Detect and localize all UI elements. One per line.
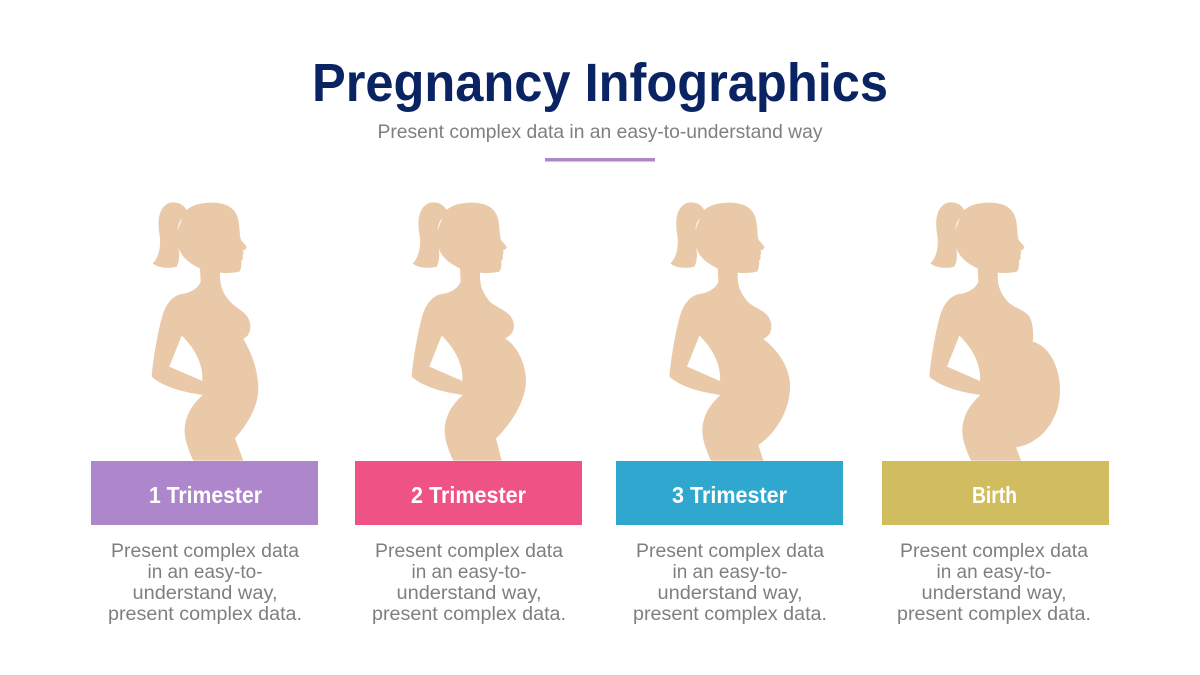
label text: 3 Trimester [672, 482, 787, 508]
description [372, 541, 566, 625]
label text: 1 Trimester [149, 482, 262, 508]
description: in an easy-to- [672, 562, 788, 583]
icon: pregnant silhouette, first trimester [152, 202, 258, 461]
description: present complex data. [633, 604, 827, 625]
description [108, 541, 302, 625]
description: present complex data. [372, 604, 566, 625]
description: Present complex data [375, 541, 563, 562]
description: understand way, [396, 583, 542, 604]
description: Present complex data [636, 541, 824, 562]
icon: pregnant silhouette, third trimester [669, 202, 790, 461]
description: in an easy-to- [148, 562, 262, 583]
label bar [616, 461, 843, 525]
description [897, 541, 1091, 625]
description [633, 541, 827, 625]
label bar [355, 461, 582, 525]
panel: 3 trimester [616, 202, 843, 625]
panel: 1 trimester [91, 202, 318, 625]
title underline accent [545, 158, 655, 162]
description: in an easy-to- [412, 562, 526, 583]
label bar [91, 461, 318, 525]
panel: 2 trimester [355, 202, 582, 625]
title: Pregnancy Infographics [312, 53, 888, 113]
label text: 2 Trimester [411, 482, 526, 508]
description: Present complex data [111, 541, 299, 562]
description: Present complex data [900, 541, 1088, 562]
icon: pregnant silhouette, second trimester [412, 202, 526, 461]
description: present complex data. [108, 604, 302, 625]
description: understand way, [922, 583, 1066, 604]
label bar [882, 461, 1109, 525]
icon: pregnant silhouette, full term [929, 202, 1060, 461]
description: in an easy-to- [936, 562, 1052, 583]
panel: birth [882, 202, 1109, 625]
description: present complex data. [897, 604, 1091, 625]
subtitle: Present complex data in an easy-to-understand way [378, 121, 823, 143]
description: understand way, [658, 583, 802, 604]
description: understand way, [132, 583, 278, 604]
label text: Birth [972, 482, 1017, 508]
